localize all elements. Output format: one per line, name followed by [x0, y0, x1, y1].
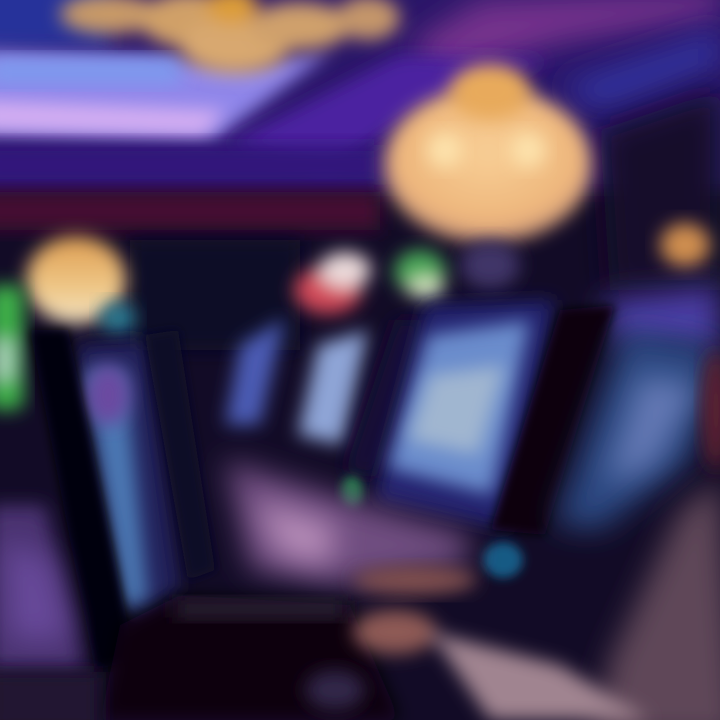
slot machine row: far left screen — [225, 318, 285, 425]
ceiling: lavender panel — [0, 50, 330, 140]
ceiling: dark purple band — [0, 145, 380, 185]
ceiling: blue haze — [0, 58, 180, 84]
ceiling: violet diagonal band — [225, 55, 550, 170]
green accent button — [341, 476, 363, 508]
second machine black frame — [145, 330, 215, 580]
red person edge — [702, 350, 720, 470]
large screen housing — [375, 300, 555, 530]
dark divider — [345, 320, 425, 480]
green lit sign at left edge — [0, 285, 24, 410]
large screen display — [388, 320, 530, 495]
left lower purple seat — [0, 505, 85, 670]
left machine black frame — [30, 330, 135, 670]
green and white lamp — [394, 250, 446, 299]
ceiling: magenta diagonal band — [410, 0, 720, 80]
ceiling: right blue strip — [560, 30, 720, 112]
ceiling: upper left blue band — [0, 0, 110, 48]
maroon wall band — [0, 192, 380, 230]
ceiling — [0, 0, 720, 290]
large chandelier — [384, 64, 592, 289]
large machine black bezel — [490, 305, 615, 535]
console with pink reflections — [225, 460, 470, 585]
left lamp — [26, 236, 136, 334]
lower tray strip — [175, 600, 345, 618]
lower left dark corner — [0, 672, 100, 720]
dark wall — [130, 240, 300, 350]
seat pink highlight — [5, 540, 70, 640]
right person shoulder — [590, 480, 720, 720]
lower center purple glint — [305, 670, 365, 710]
right screen — [555, 330, 715, 530]
small right lamp — [660, 223, 710, 267]
hand upper — [353, 566, 477, 594]
top chandelier — [60, 0, 400, 74]
right purple machines glow — [600, 285, 720, 350]
blue accent button — [483, 542, 523, 578]
console pale highlight — [255, 500, 335, 565]
slot machine row: mid screen — [298, 330, 368, 445]
hand lower and arm — [353, 610, 650, 720]
left machine screen — [75, 340, 180, 620]
ceiling: dark right corner — [600, 90, 720, 290]
ceiling: bright strip — [0, 100, 225, 136]
lower dark base — [100, 595, 400, 720]
red and white lamp — [294, 252, 371, 314]
